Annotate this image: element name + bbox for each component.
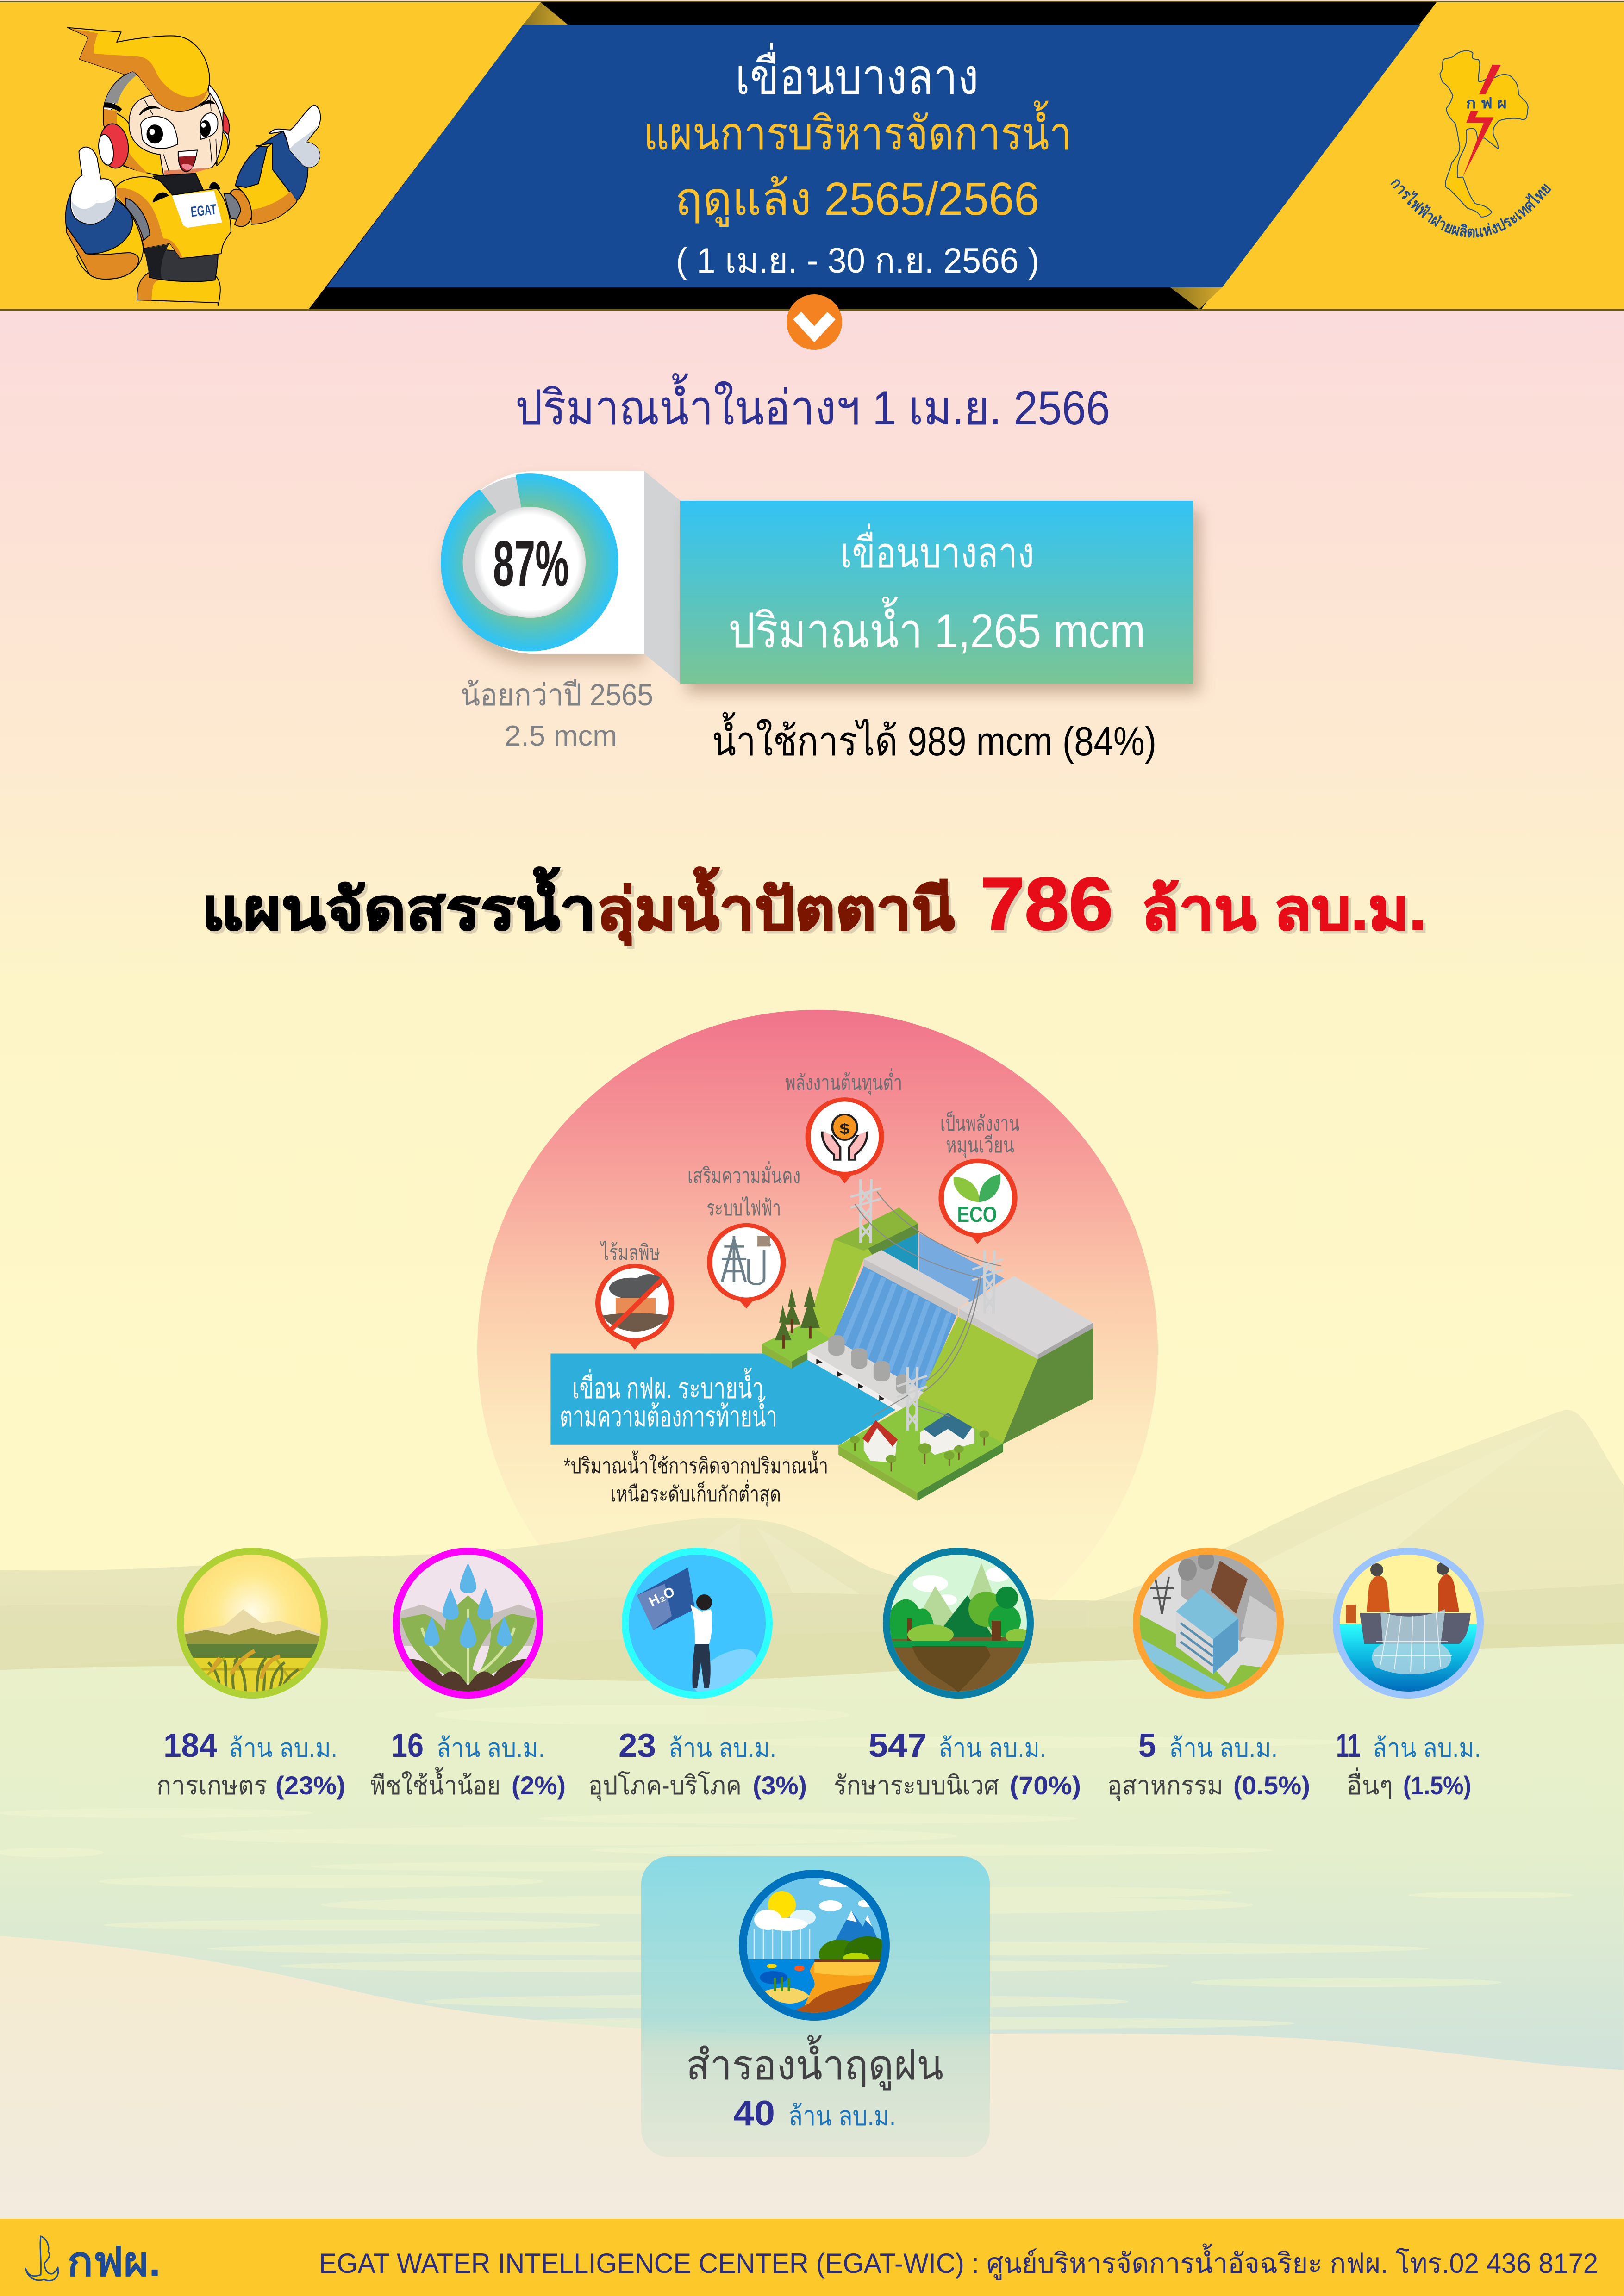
- logo letters: ก ฟ ผ: [1466, 95, 1507, 112]
- pin: renewable energy: ECO: [957, 1202, 997, 1226]
- industry values: [1107, 1727, 1310, 1801]
- consumption values: 23: [618, 1727, 656, 1764]
- header left yellow panel: [0, 2, 541, 309]
- mascot right arm: [235, 131, 308, 201]
- pin: low cost energy: [808, 1100, 881, 1183]
- consumption values: (3%): [753, 1771, 807, 1800]
- header right yellow panel: [1201, 2, 1624, 309]
- industry values: (0.5%): [1233, 1771, 1310, 1800]
- dam main body: [917, 1317, 1038, 1444]
- allocation headline: ลุ่มน้ำปัตตานี: [596, 867, 955, 946]
- reserve unit: ล้าน ลบ.ม.: [788, 2101, 896, 2131]
- pin labels: หมุนเวียน: [946, 1133, 1014, 1158]
- mascot: EGAT: [190, 201, 217, 220]
- title: ( 1 เม.ย. - 30 ก.ย. 2566 ): [676, 241, 1039, 280]
- reservoir: [873, 1233, 918, 1273]
- transmission towers: [850, 1179, 1003, 1431]
- pin: renewable energy: [941, 1161, 1015, 1244]
- mascot: [66, 28, 320, 305]
- left bank: [762, 1207, 918, 1360]
- water volume box: เขื่อนบางลาง: [840, 523, 1034, 577]
- pin labels: [600, 1068, 1019, 1264]
- footer text: EGAT WATER INTELLIGENCE CENTER (EGAT-WIC) : ศูนย์บริหารจัดการน้ำอัจฉริยะ กฟผ. โทร.02 436 8172: [319, 2243, 1598, 2280]
- footer bar: [0, 2219, 1624, 2296]
- section heading: ปริมาณน้ำในอ่างฯ 1 เม.ย. 2566: [515, 373, 1110, 435]
- water volume box: [680, 501, 1193, 684]
- comparison note: [461, 678, 653, 752]
- icon: footer logo: [25, 2236, 58, 2281]
- header band: [0, 1, 1624, 311]
- agriculture values: ล้าน ลบ.ม.: [229, 1733, 337, 1762]
- low-water crop values: [370, 1727, 566, 1800]
- mascot left arm: [77, 200, 143, 279]
- allocation headline: [201, 862, 1426, 946]
- ecosystem values: ล้าน ลบ.ม.: [938, 1733, 1046, 1762]
- header blue panel: [326, 25, 1421, 287]
- consumption values: [588, 1727, 807, 1801]
- pin labels: ระบบไฟฟ้า: [706, 1196, 781, 1220]
- title: แผนการบริหารจัดการน้ำ: [643, 100, 1072, 160]
- mascot ear: [97, 122, 131, 170]
- consumption values: อุปโภค-บริโภค: [588, 1771, 742, 1801]
- agriculture values: (23%): [275, 1771, 345, 1800]
- mascot right hand: [269, 105, 320, 168]
- tree island: [762, 1323, 833, 1362]
- fold right: [1170, 287, 1222, 309]
- icon: other fishing: [1333, 1548, 1484, 1699]
- other values: [1336, 1727, 1481, 1800]
- comparison note: 2.5 mcm: [505, 720, 617, 752]
- banner text: ตามความต้องการท้ายน้ำ: [560, 1396, 777, 1433]
- apron: [807, 1338, 924, 1410]
- banner text: เขื่อน กฟผ. ระบายน้ำ: [572, 1368, 764, 1405]
- icon: industry: [1133, 1548, 1284, 1699]
- turbine cylinders: [828, 1335, 909, 1394]
- gauge: 87 percent: [443, 471, 644, 654]
- other values: (1.5%): [1403, 1771, 1471, 1800]
- gauge: 87 percent: 87%: [493, 527, 569, 600]
- ecosystem values: 547: [868, 1727, 927, 1764]
- title: ฤดูแล้ง 2565/2566: [675, 173, 1039, 227]
- icon: water cycle: [739, 1870, 891, 2021]
- agriculture values: การเกษตร: [156, 1771, 267, 1800]
- mascot left hand: [70, 147, 116, 224]
- industry values: อุสาหกรรม: [1107, 1771, 1223, 1801]
- mascot helmet: [103, 71, 229, 176]
- mascot hair: [68, 28, 210, 111]
- footnote: [564, 1450, 828, 1507]
- fold connector: [644, 471, 681, 684]
- title: [643, 43, 1072, 280]
- reserve label: สำรองน้ำฤดูฝน: [686, 2035, 943, 2091]
- decorative circle behind dam: [477, 1010, 1158, 1690]
- pin: pollution free: [598, 1266, 672, 1350]
- icon: ecosystem: [883, 1548, 1034, 1699]
- spillway: [833, 1266, 957, 1394]
- icon: consumption: H₂O: [646, 1584, 677, 1610]
- pin labels: ไร้มลพิษ: [600, 1240, 660, 1264]
- agriculture values: [156, 1727, 345, 1800]
- usable water: น้ำใช้การได้ 989 mcm (84%): [712, 712, 1156, 764]
- low-water crop values: 16: [391, 1727, 424, 1764]
- allocation headline: 786: [981, 862, 1113, 945]
- logo curved caption: การไฟฟ้าฝ่ายผลิตแห่งประเทศไทย: [1387, 174, 1555, 241]
- banner text: [560, 1368, 777, 1433]
- icon: agriculture: [177, 1548, 328, 1699]
- footnote: *ปริมาณน้ำใช้การคิดจากปริมาณน้ำ: [564, 1450, 828, 1478]
- icon: consumption: [622, 1548, 773, 1704]
- mascot eyes: [141, 117, 178, 149]
- allocation headline: ล้าน ลบ.ม.: [1141, 877, 1426, 942]
- logo: EGAT map: [1440, 51, 1528, 217]
- footer brand: กฟผ.: [67, 2239, 161, 2284]
- low-water crop values: (2%): [512, 1771, 566, 1800]
- mascot lower body: [137, 273, 220, 305]
- pin: grid security: [710, 1225, 783, 1308]
- houses: [864, 1422, 897, 1462]
- mascot body: [143, 248, 218, 282]
- background landscape: [0, 1410, 1624, 2239]
- industry values: ล้าน ลบ.ม.: [1169, 1733, 1278, 1762]
- ring arc: [443, 475, 617, 649]
- footnote: เหนือระดับเก็บกักต่ำสุด: [610, 1479, 781, 1507]
- water volume box: ปริมาณน้ำ 1,265 mcm: [728, 597, 1145, 658]
- pin labels: เสริมความมั่นคง: [687, 1161, 800, 1188]
- dam crest: [864, 1250, 970, 1308]
- chevron button: [787, 294, 842, 350]
- dam illustration: [550, 1179, 1093, 1501]
- mascot face: [129, 93, 223, 176]
- trees: [775, 1286, 820, 1340]
- panel: rainy season reserve: [641, 1856, 990, 2157]
- title: เขื่อนบางลาง: [735, 43, 979, 105]
- industry values: 5: [1138, 1727, 1156, 1764]
- pin labels: เป็นพลังงาน: [940, 1111, 1019, 1135]
- consumption values: ล้าน ลบ.ม.: [668, 1733, 776, 1762]
- icon: low-water crops: [393, 1548, 543, 1699]
- comparison note: น้อยกว่าปี 2565: [461, 678, 653, 712]
- power lines: [855, 1192, 1001, 1417]
- low-water crop values: พืชใช้น้ำน้อย: [370, 1767, 500, 1800]
- ecosystem values: รักษาระบบนิเวศ: [834, 1771, 999, 1800]
- other values: 11: [1336, 1727, 1361, 1764]
- fold left: [523, 2, 568, 25]
- low-water crop values: ล้าน ลบ.ม.: [437, 1733, 545, 1762]
- map outline: [1440, 51, 1528, 217]
- pin: low cost energy: $: [839, 1120, 850, 1137]
- ecosystem values: (70%): [1010, 1771, 1081, 1800]
- other values: ล้าน ลบ.ม.: [1373, 1733, 1481, 1762]
- other values: อื่นๆ: [1347, 1767, 1393, 1800]
- pin labels: พลังงานต้นทุนต่ำ: [785, 1068, 902, 1096]
- allocation headline: แผนจัดสรรน้ำ: [201, 867, 596, 942]
- ecosystem values: [834, 1727, 1081, 1800]
- water banner: [550, 1353, 899, 1445]
- lightning bolt: [1463, 65, 1501, 177]
- agriculture values: 184: [163, 1727, 217, 1764]
- reserve value: 40: [733, 2094, 775, 2133]
- village island: [838, 1399, 1003, 1493]
